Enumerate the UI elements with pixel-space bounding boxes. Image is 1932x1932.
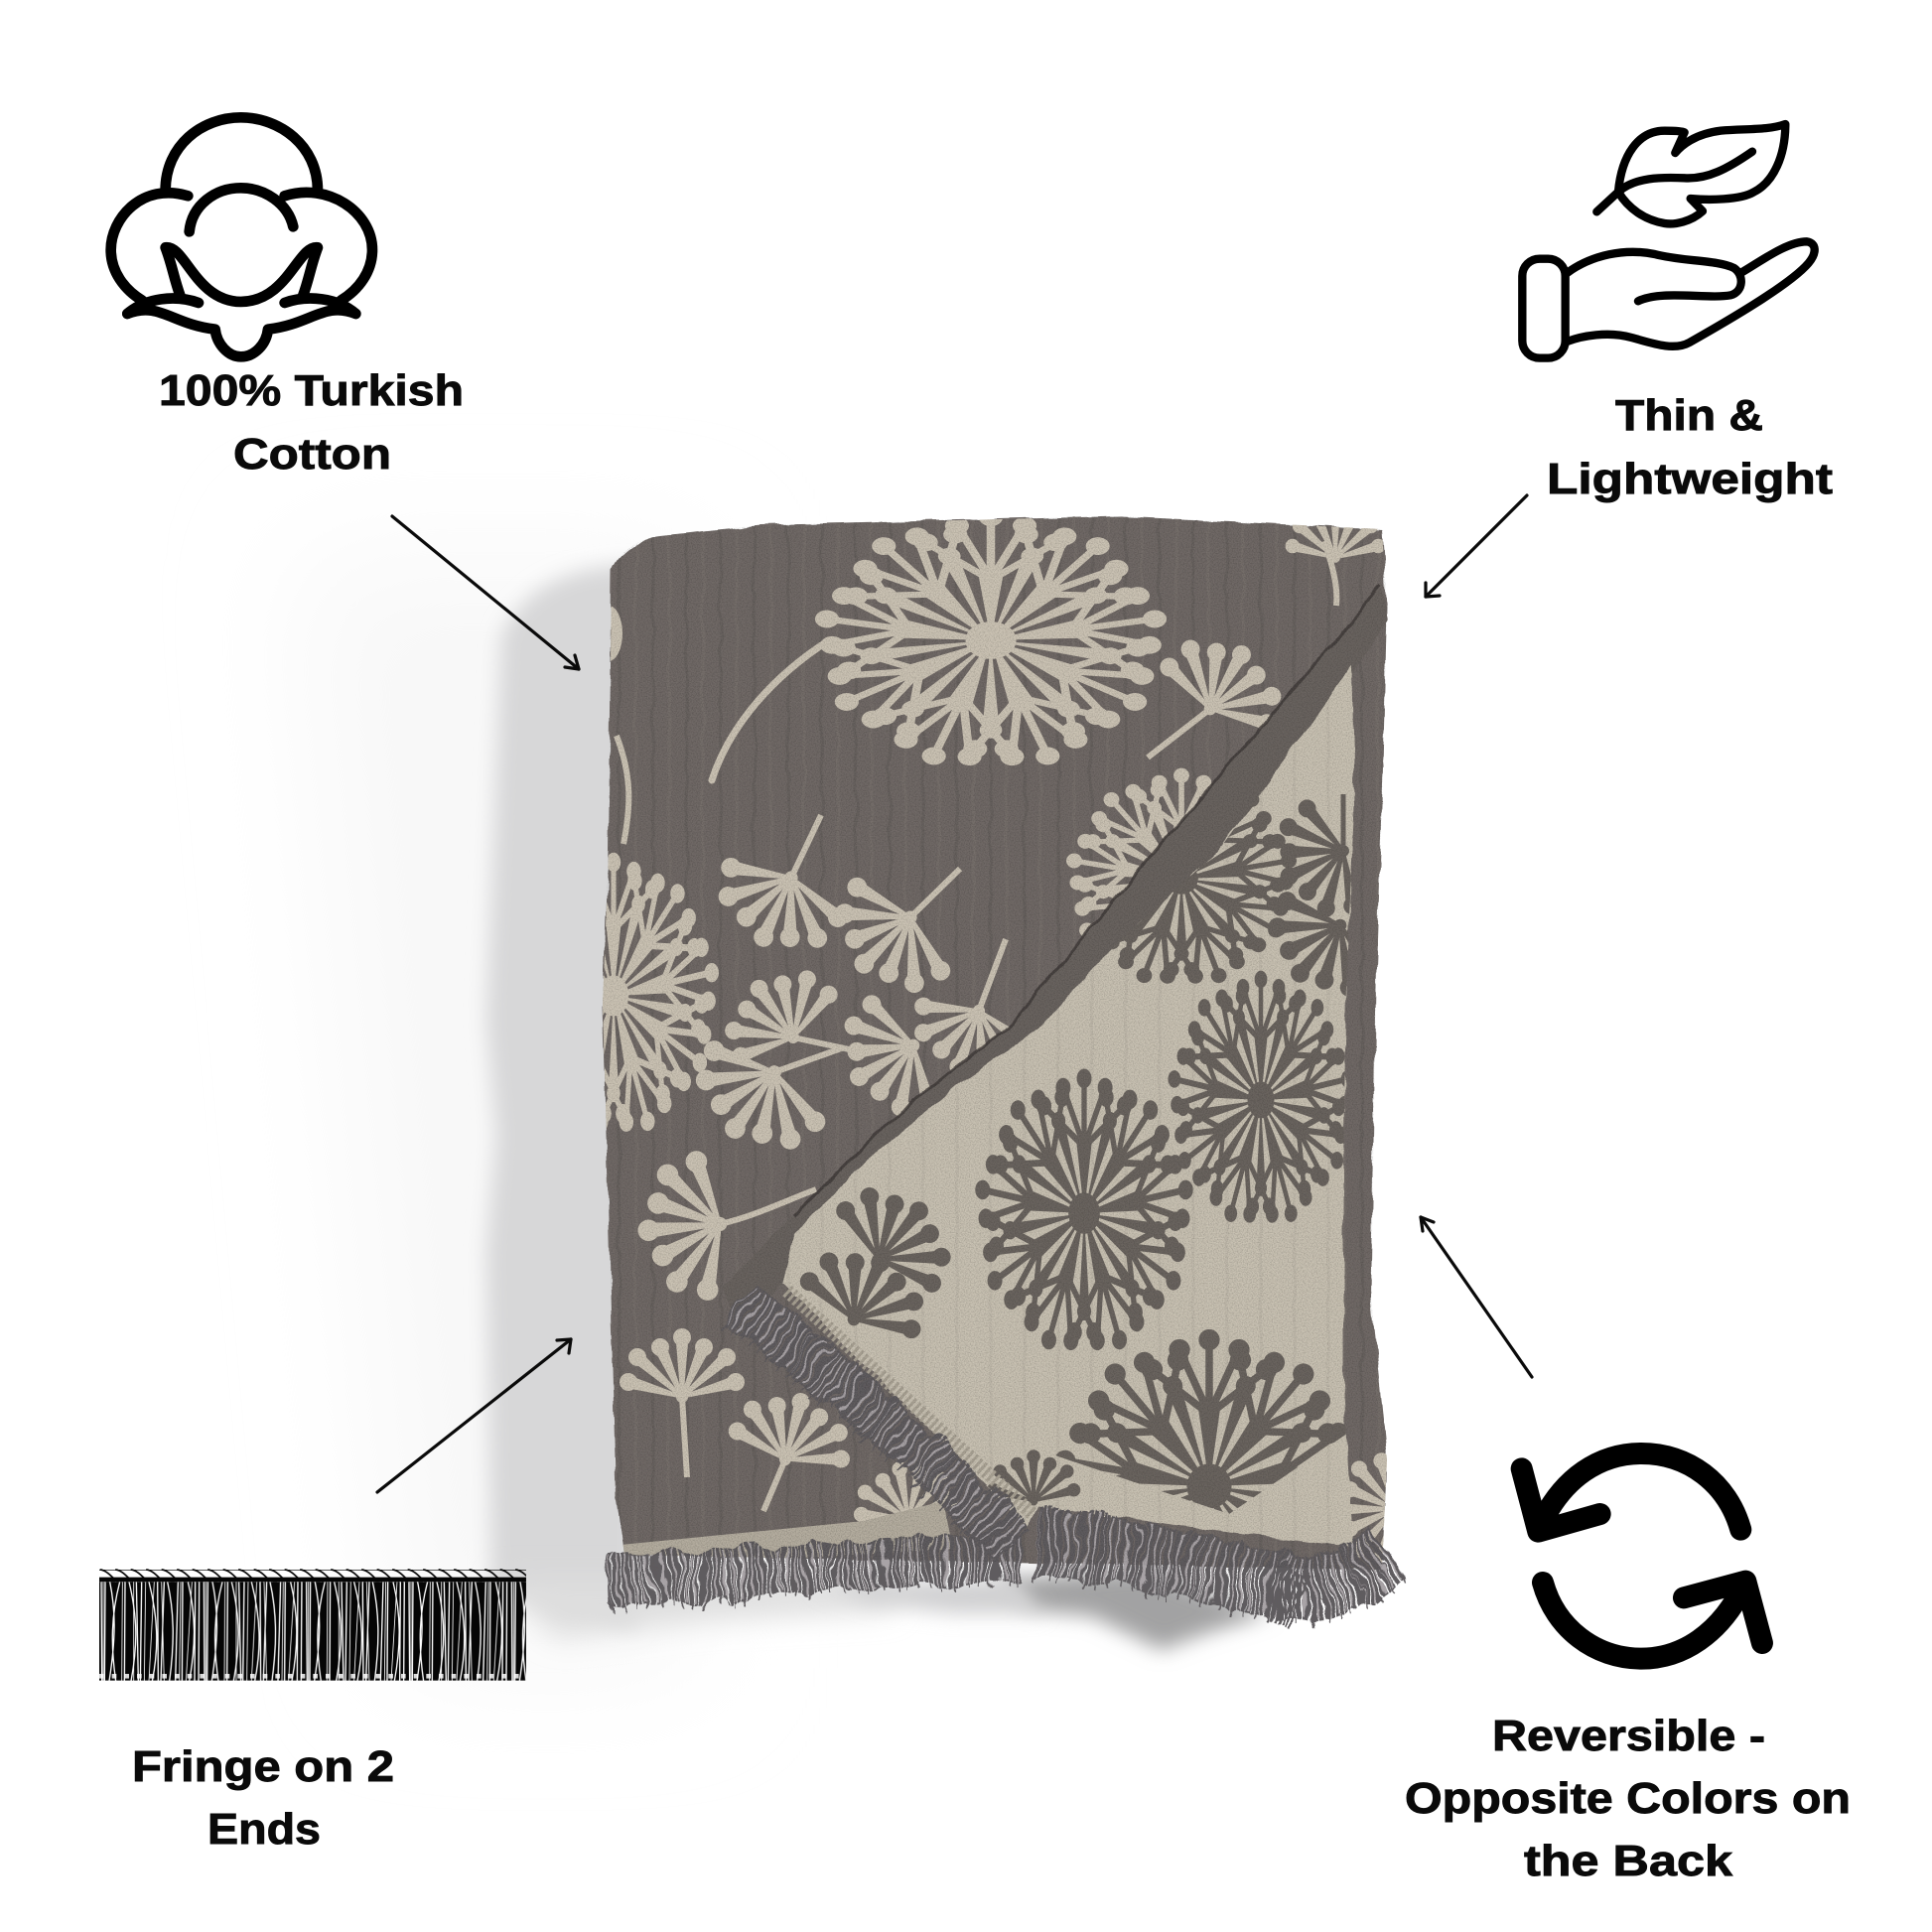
label: Reversible - Opposite Colors on the Back [1405,1712,1851,1885]
label: 100% Turkish Cotton [159,366,464,479]
icon: reversible arrows [1522,1453,1762,1659]
arrow: cotton to blanket [392,516,579,669]
reverse side flap: light [782,665,1395,1657]
label: 100% Turkish Cotton: 100% Turkish [159,366,464,415]
icon: leaf over hand [1522,124,1815,358]
label: Reversible - Opposite Colors on the Back: Opposite Colors on [1405,1774,1851,1823]
blanket body: dark side [603,516,1387,1570]
label: Thin & Lightweight: Lightweight [1547,455,1833,503]
seed fan 5 [670,1026,844,1178]
lower hem [621,1501,953,1569]
arrow: reversible to blanket [1421,1217,1532,1377]
large dandelion top [712,502,1183,783]
arrow: fringe to blanket [377,1339,571,1492]
top-left motif fragment [595,606,622,661]
fringe: flap bottom [1038,1541,1390,1600]
small fan lower left 2 [791,1226,944,1353]
seed fan 1 [697,815,857,975]
top-right motif fragment [1286,503,1385,606]
dandelion pattern: dark on light [791,763,1395,1657]
large dandelion right [1159,965,1363,1241]
seed fan 4 [703,945,854,1078]
seed fan 8 [631,1149,816,1307]
fringe: fold edge [738,1303,1013,1546]
dandelion middle right [1055,763,1308,999]
stitched hem on fold edge [787,1291,1033,1514]
fans on right strip [1244,791,1395,1023]
label: 100% Turkish Cotton: Cotton [233,430,391,479]
label: Thin & Lightweight: Thin & [1615,391,1763,440]
dandelion bottom right [1039,1322,1379,1657]
fabric grain [596,511,1400,1628]
seed fan 6 [818,986,952,1139]
seed fan 11 [846,1452,962,1533]
right strip motif [1333,1452,1400,1566]
label: Thin & Lightweight [1547,391,1833,503]
seed fan 9 [620,1328,745,1477]
seed fan 2 [808,864,964,1020]
left stem [617,736,628,844]
label: Fringe on 2 Ends: Ends [207,1805,321,1854]
small fan bottom [987,1449,1080,1505]
large dandelion left [603,852,719,1132]
seed fan 3 [897,939,1039,1096]
diagonal fold band [723,586,1388,1335]
label: Fringe on 2 Ends [132,1742,394,1854]
dandelion pattern: light on dark [498,502,1400,1569]
arrow: lightweight to blanket [1426,495,1527,597]
icon: fringe swatch [99,1569,526,1681]
large dandelion centre [965,1062,1203,1370]
label: Reversible - Opposite Colors on the Back: the Back [1524,1837,1733,1885]
label: Fringe on 2 Ends: Fringe on 2 [132,1742,394,1791]
soft shadows under blanket [298,556,1271,1668]
small fan lower left 1 [824,1162,975,1306]
label: Reversible - Opposite Colors on the Back: Reversible - [1492,1712,1765,1760]
icon: cotton boll [111,117,372,356]
seed fan 7 [1148,614,1304,758]
seed fan 10 [724,1377,864,1511]
mid motif below fold [1055,763,1308,999]
fringe: bottom left [608,1559,1023,1585]
photo: folded blanket [498,502,1400,1657]
